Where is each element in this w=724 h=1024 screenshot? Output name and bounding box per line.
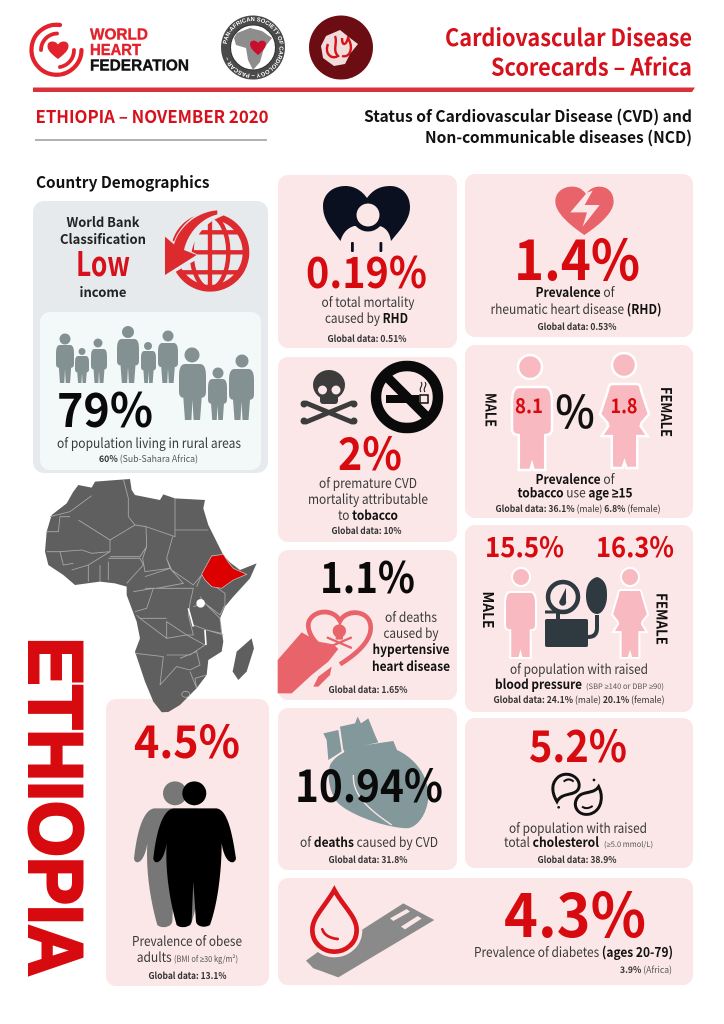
text: hypertensive description: Global data: 1.65% <box>328 682 408 696</box>
label: male: MALE <box>480 393 501 427</box>
text: hypertensive description: of deaths <box>385 607 437 626</box>
icon: anatomical heart <box>323 717 428 828</box>
panel: demographics <box>33 201 268 473</box>
text: RHD mortality description: Global data: 0.51% <box>328 331 407 345</box>
panel: rural population <box>40 312 261 470</box>
text: obese adults: (BMI of ≥30 kg/m²) <box>174 953 238 965</box>
stat: male tobacco: 8.1 <box>515 390 543 419</box>
icon: globe with falling arrow <box>162 208 247 288</box>
text: diabetes description <box>474 941 673 976</box>
text: RHD prevalence description: Global data: 0.53% <box>538 319 617 333</box>
stat: 4.3 percent: 4.3% <box>504 866 646 955</box>
panel: obesity <box>106 699 269 986</box>
panel: cholesterol <box>465 711 693 868</box>
map: Africa with Ethiopia highlighted <box>45 479 257 712</box>
text: cholesterol description <box>504 818 653 866</box>
text: hypertensive description: hypertensive <box>372 639 450 658</box>
subtitle: Status of Cardiovascular Disease (CVD) and <box>364 103 692 127</box>
label: female: FEMALE <box>652 593 672 645</box>
stat: 79 percent: 79% <box>57 372 153 441</box>
text: RHD prevalence description: rheumatic heart disease (RHD) <box>490 299 662 318</box>
panel: tobacco use <box>465 345 693 518</box>
stat: 2 percent: 2% <box>338 418 402 483</box>
logo: PASCAR: PAN-AFRICAN SOCIETY OF CARDIOLOGY – PASCAR – <box>222 17 284 78</box>
text: world bank classification: Low <box>76 237 130 286</box>
stat: 4.5 percent: 4.5% <box>134 706 240 771</box>
panel: CVD deaths <box>278 708 457 870</box>
text: cholesterol description: (≥5.0 mmol/L) <box>604 839 653 850</box>
panel: RHD prevalence <box>465 174 693 337</box>
panel: diabetes <box>278 866 693 985</box>
red hatched divider <box>33 88 695 92</box>
text: obese adults: Global data: 13.1% <box>148 968 227 982</box>
text: RHD prevalence description: Prevalence of <box>536 282 615 301</box>
panel: RHD mortality <box>278 175 457 348</box>
stat: 0.19 percent: 0.19% <box>306 239 427 301</box>
stat: 1.4 percent: 1.4% <box>514 216 640 297</box>
text: blood pressure description: of population with raised <box>510 659 648 678</box>
panel: blood pressure <box>465 525 693 712</box>
stat: male blood pressure: 15.5% <box>485 526 564 566</box>
text: obese adults: adults <box>137 947 172 966</box>
text: tobacco mortality description: to tobacco <box>338 505 398 524</box>
icon: no smoking <box>376 366 438 428</box>
icon: male figure <box>505 568 536 658</box>
text: blood pressure description: blood pressure <box>495 674 582 693</box>
text: hypertensive description: heart disease <box>372 656 450 675</box>
stat: female tobacco: 1.8 <box>610 390 638 419</box>
logo: World Heart Federation: WORLD <box>90 26 148 44</box>
label: female: FEMALE <box>656 387 677 437</box>
text: tobacco mortality description: of premature CVD <box>319 473 417 492</box>
icon: hand holding heart with skull <box>278 612 371 693</box>
text: cholesterol description: of population with raised <box>509 818 647 837</box>
text: RHD mortality description: of total mortality <box>322 292 415 311</box>
icon: female figure <box>612 568 648 658</box>
text: obese adults <box>132 931 242 982</box>
text: tobacco description <box>496 469 660 515</box>
text: CVD deaths description: Global data: 31.8% <box>328 852 408 866</box>
icon: broken heart <box>555 187 614 235</box>
subtitle: Non-communicable diseases (NCD) <box>425 124 692 148</box>
icon: dark heart with figure <box>323 186 410 252</box>
stat: female blood pressure: 16.3% <box>596 526 674 566</box>
text: tobacco mortality description: mortality attributable <box>308 489 428 508</box>
stat: 1.1 percent: 1.1% <box>320 544 415 606</box>
heading: country and date: ETHIOPIA – NOVEMBER 2020 <box>36 104 268 129</box>
stat: 10.94 percent: 10.94% <box>295 750 443 815</box>
stat: 5.2 percent: 5.2% <box>529 711 627 775</box>
icon: skull and crossbones <box>300 370 358 424</box>
label: male: MALE <box>478 592 499 629</box>
text: obese adults: Prevalence of obese <box>132 931 242 950</box>
heading: country demographics: Country Demographics <box>36 169 210 193</box>
text: world bank classification: Classification <box>60 228 146 248</box>
text: tobacco description: Global data: 36.1% (male) 6.8% (female) <box>496 501 660 515</box>
icon: blood pressure monitor <box>545 577 607 647</box>
text: hypertensive description <box>328 607 450 696</box>
text: CVD deaths description: of deaths caused by CVD <box>300 832 438 851</box>
text: diabetes description: 3.9% (Africa) <box>620 963 672 976</box>
text: rural areas: 60% (Sub-Sahara Africa) <box>99 452 198 465</box>
text: cholesterol description: Global data: 38.9% <box>538 852 617 866</box>
icon: blood drop on test strip <box>306 890 434 977</box>
icon: female figure <box>600 353 649 468</box>
logo: World Heart Federation: HEART <box>90 42 142 59</box>
stat: percent sign: % <box>556 376 594 441</box>
icon: male figure <box>512 355 552 470</box>
text: diabetes description: Prevalence of diabetes (ages 20-79) <box>474 941 673 961</box>
text: rural areas <box>57 433 241 465</box>
text: hypertensive description: caused by <box>384 623 439 642</box>
text: blood pressure description: Global data: 24.1% (male) 20.1% (female) <box>494 692 664 706</box>
icon: groups of people <box>56 326 254 420</box>
subtitle <box>364 103 692 148</box>
logo: World Heart Federation: FEDERATION <box>90 58 189 74</box>
text: world bank classification: income <box>80 281 127 301</box>
text: tobacco description: Prevalence of <box>536 469 615 488</box>
title: Scorecards – Africa <box>491 48 692 82</box>
text: rural areas: of population living in rural areas <box>57 433 241 452</box>
text: tobacco description: tobacco use age ≥15 <box>518 482 633 502</box>
text: RHD mortality description: caused by RHD <box>325 308 408 327</box>
text: tobacco mortality description <box>308 473 428 537</box>
panel: hypertensive heart disease <box>278 544 457 700</box>
text: tobacco mortality description: Global data: 10% <box>332 523 402 537</box>
title: Cardiovascular Disease <box>445 19 692 53</box>
icon: cholesterol droplets <box>553 774 601 814</box>
text: world bank classification <box>60 211 146 301</box>
text: RHD mortality description <box>322 292 415 345</box>
vertical country name: ETHIOPIA <box>12 638 98 976</box>
panel: tobacco mortality <box>278 357 457 542</box>
text: blood pressure description <box>494 659 664 706</box>
logo: World Heart Federation <box>32 25 189 75</box>
text: CVD deaths description <box>300 832 438 866</box>
text: blood pressure description: (SBP ≥140 or DBP ≥90) <box>586 681 664 692</box>
icon: obese figures <box>134 781 236 927</box>
title <box>445 19 692 82</box>
text: cholesterol description: total cholesterol <box>504 832 599 851</box>
text: RHD prevalence description <box>490 282 662 333</box>
logo: Ethiopian cardiac society <box>309 16 373 80</box>
text: world bank classification: World Bank <box>66 211 140 231</box>
